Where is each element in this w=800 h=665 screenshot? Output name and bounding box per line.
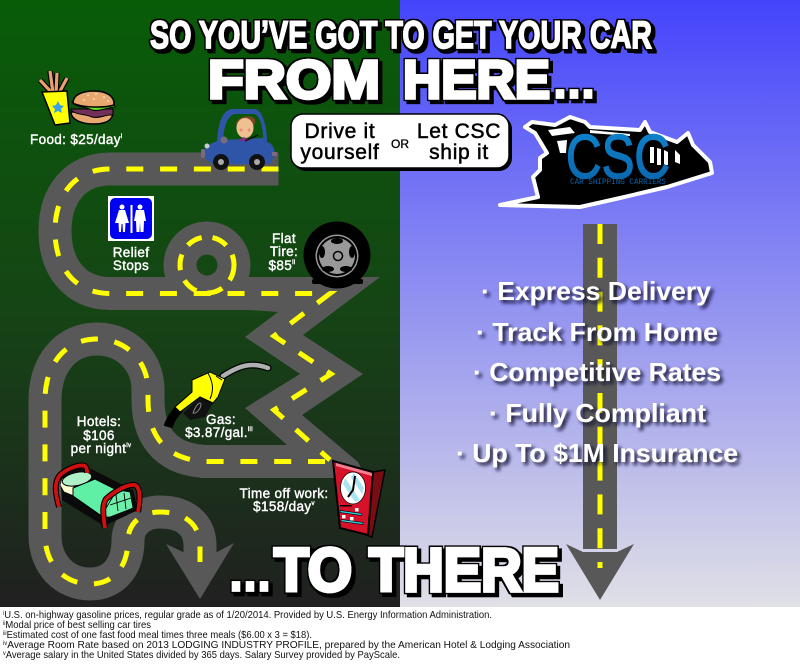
title line two: HERE xyxy=(403,50,550,110)
label: flat tire cost xyxy=(269,231,298,273)
callout: drive or ship choice xyxy=(291,114,512,171)
label: food cost: Food: $25/day xyxy=(30,132,121,147)
title line two: ... xyxy=(553,50,595,110)
label: relief stops xyxy=(113,245,149,273)
icon: flat tire xyxy=(304,222,370,288)
benefits list xyxy=(456,276,738,468)
label: hotel cost: Hotels: xyxy=(77,414,121,429)
footnotes: i xyxy=(3,611,4,617)
closing title: THERE xyxy=(369,536,559,604)
label: flat tire cost: ii xyxy=(292,260,295,266)
closing title xyxy=(229,536,559,604)
footnotes: Estimated cost of one fast food meal times three meals ($6.00 x 3 = $18). xyxy=(7,630,312,641)
benefits list: · Fully Compliant xyxy=(489,398,706,428)
label: time off work cost xyxy=(240,486,328,514)
title line two xyxy=(208,50,595,110)
winding road: drive it yourself xyxy=(45,169,380,599)
footnotes: Modal price of best selling car tires xyxy=(5,620,151,631)
label: hotel cost xyxy=(71,414,131,456)
callout: drive or ship choice: yourself xyxy=(300,141,380,164)
title line two: FROM xyxy=(208,50,380,110)
benefits list: · Competitive Rates xyxy=(473,357,721,387)
icon: blue car with driver xyxy=(201,109,277,170)
icon: red time clock xyxy=(333,461,385,537)
callout: drive or ship choice: OR xyxy=(391,137,409,151)
closing title: TO xyxy=(274,536,352,604)
label: time off work cost: $158/day xyxy=(253,499,312,514)
icon: CSC car carrier logo xyxy=(500,117,712,207)
label: gas price xyxy=(185,412,253,440)
panel: green left background xyxy=(0,0,400,607)
label: relief stops: Stops xyxy=(113,258,149,273)
icon: fries and burger xyxy=(40,71,115,125)
benefits list: · Express Delivery xyxy=(481,276,712,306)
footnotes: U.S. on-highway gasoline prices, regular grade as of 1/20/2014. Provided by U.S. Energy Information Administration. xyxy=(4,610,492,621)
icon: gas pump nozzle xyxy=(168,365,268,427)
label: hotel cost: $106 xyxy=(83,428,115,443)
footnotes: Average salary in the United States divided by 365 days. Salary Survey provided by PayScale. xyxy=(6,650,400,661)
icon: CSC car carrier logo: CSC xyxy=(566,123,670,192)
label: food cost: i xyxy=(121,134,123,140)
callout: drive or ship choice: ship it xyxy=(429,141,489,164)
straight road arrow: CSC route xyxy=(566,224,634,600)
label: flat tire cost: Tire: xyxy=(270,244,298,259)
closing title: ... xyxy=(229,536,271,604)
callout: drive or ship choice: Let CSC xyxy=(417,120,501,143)
footnotes: v xyxy=(3,651,6,657)
label: relief stops: Relief xyxy=(113,245,149,260)
benefits list: · Track From Home xyxy=(476,317,718,347)
footnotes: iii xyxy=(3,631,7,637)
label: flat tire cost: $85 xyxy=(269,258,292,273)
panel: blue right background xyxy=(400,0,800,607)
callout: drive or ship choice: Drive it xyxy=(305,120,375,143)
footnotes: ii xyxy=(3,621,5,627)
label: time off work cost: Time off work: xyxy=(240,486,328,501)
footnotes: Average Room Rate based on 2013 LODGING INDUSTRY PROFILE, prepared by the American Hotel & Lodging Association xyxy=(7,640,570,651)
label: gas price: iii xyxy=(248,427,253,433)
icon: CSC car carrier logo: CAR SHIPPING CARRIERS xyxy=(570,178,666,187)
label: hotel cost: per night xyxy=(71,441,126,456)
benefits list: · Up To $1M Insurance xyxy=(456,438,738,468)
label: flat tire cost: Flat xyxy=(272,231,296,246)
footnotes xyxy=(3,610,570,661)
label: hotel cost: iv xyxy=(126,443,131,449)
footnotes: iv xyxy=(3,641,7,647)
label: gas price: Gas: xyxy=(206,412,236,427)
label: gas price: $3.87/gal. xyxy=(185,425,248,440)
panel: footnote background xyxy=(0,607,800,665)
icon: restroom sign xyxy=(108,196,154,241)
icon: bed xyxy=(56,465,140,528)
label: time off work cost: v xyxy=(312,501,315,507)
